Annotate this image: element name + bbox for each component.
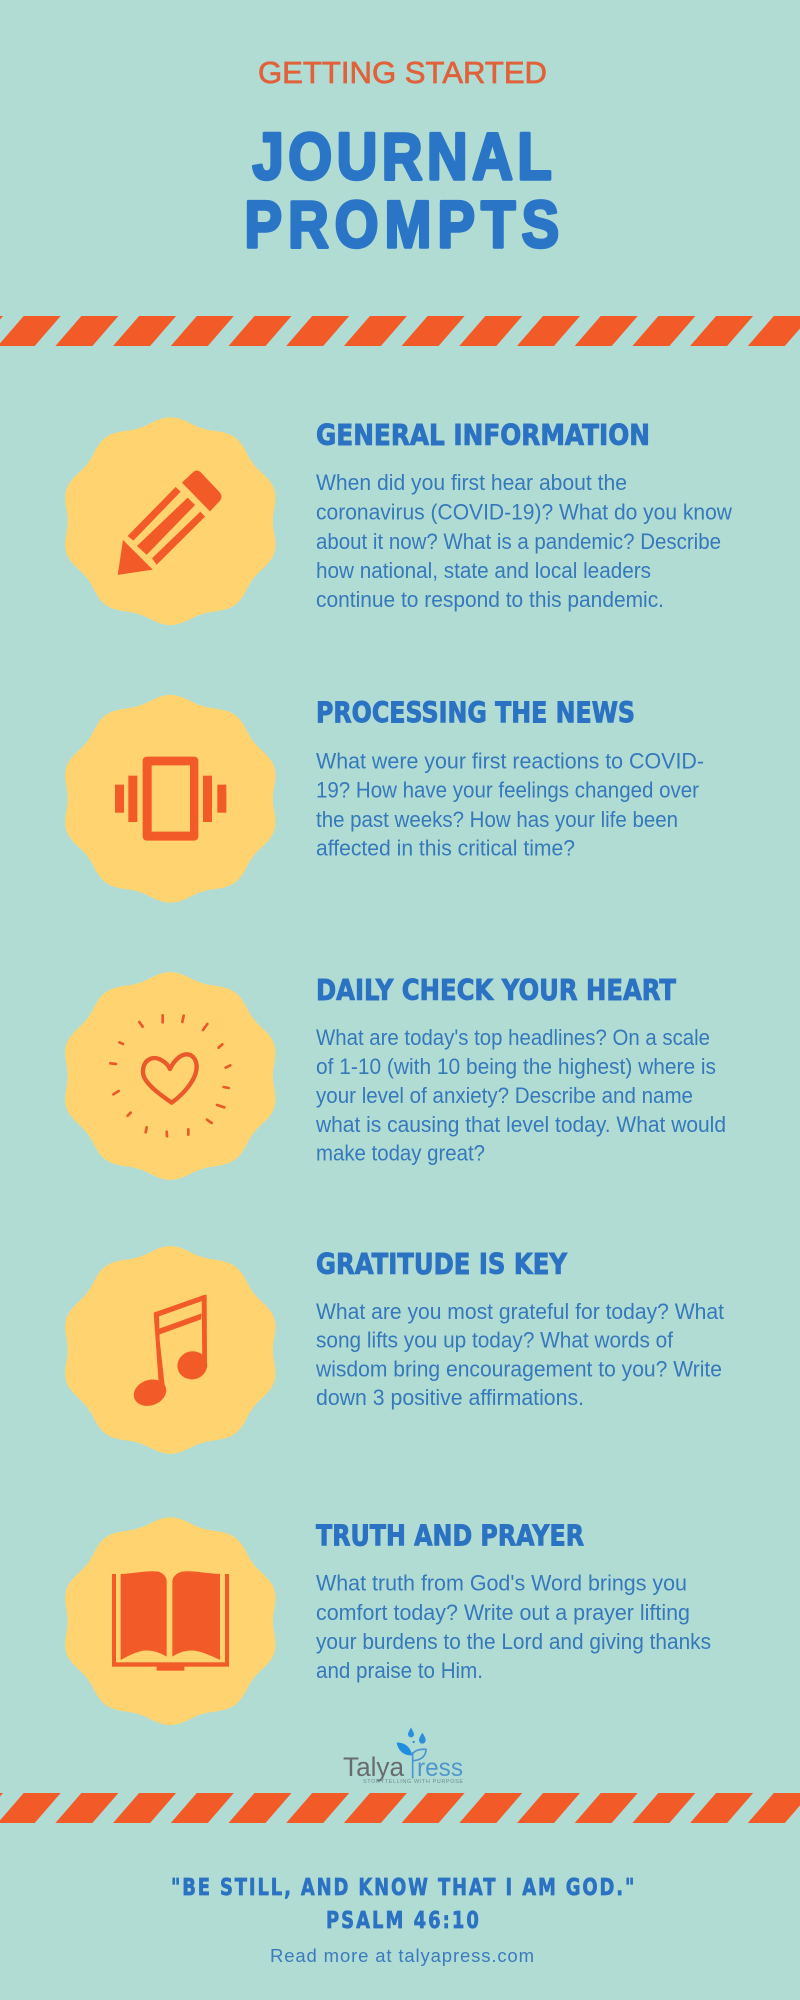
body text: your level of anxiety? Describe and name xyxy=(316,1083,693,1108)
body text: continue to respond to this pandemic. xyxy=(316,587,664,612)
logo icon: drops, leaves and P xyxy=(397,1727,426,1778)
wordmark dark: Talya xyxy=(343,1752,405,1782)
body text: the past weeks? How has your life been xyxy=(316,807,678,832)
body text: and praise to Him. xyxy=(316,1658,483,1683)
icon: open book xyxy=(112,1571,229,1671)
body text: wisdom bring encouragement to you? Write xyxy=(315,1357,722,1382)
panel: general information xyxy=(57,417,732,625)
icon: vibrating phone xyxy=(115,757,226,841)
body text: your burdens to the Lord and giving thanks xyxy=(316,1629,711,1654)
panel: gratitude is key xyxy=(57,1246,724,1454)
heading: TRUTH AND PRAYER xyxy=(316,1520,584,1553)
icon: pencil xyxy=(118,471,221,574)
citation: PSALM 46:10 xyxy=(326,1907,479,1934)
body text: When did you first hear about the xyxy=(316,470,627,495)
title line 2: PROMPTS xyxy=(244,188,559,261)
body text: how national, state and local leaders xyxy=(316,558,651,583)
read more link: Read more at talyapress.com xyxy=(270,1945,534,1966)
panel: processing the news xyxy=(57,695,704,903)
body text: song lifts you up today? What words of xyxy=(316,1328,674,1353)
body text: affected in this critical time? xyxy=(316,836,575,860)
body text xyxy=(315,1299,724,1410)
body text xyxy=(316,1571,711,1683)
badge xyxy=(57,695,284,903)
striped divider bottom xyxy=(0,1793,800,1823)
body text: make today great? xyxy=(316,1141,485,1166)
badge xyxy=(57,1517,284,1725)
panel: truth and prayer xyxy=(57,1517,711,1725)
logo: Talya Press xyxy=(343,1727,463,1785)
body text xyxy=(316,748,704,860)
quote: "BE STILL, AND KNOW THAT I AM GOD." xyxy=(171,1874,634,1901)
heading: DAILY CHECK YOUR HEART xyxy=(316,974,676,1007)
body text: down 3 positive affirmations. xyxy=(316,1385,584,1410)
header xyxy=(244,55,559,261)
body text: about it now? What is a pandemic? Describe xyxy=(316,529,721,554)
eyebrow: getting started: GETTING STARTED xyxy=(258,55,547,90)
body text: of 1-10 (with 10 being the highest) where is xyxy=(316,1054,716,1079)
footer xyxy=(171,1874,634,1966)
icon: music notes xyxy=(130,1294,210,1410)
body text: What were your first reactions to COVID- xyxy=(316,748,704,774)
body text xyxy=(316,470,732,612)
badge xyxy=(57,1246,284,1454)
body text xyxy=(315,1025,726,1166)
badge xyxy=(57,417,284,625)
icon: heart with rays xyxy=(110,1015,230,1136)
heading: PROCESSING THE NEWS xyxy=(316,697,635,730)
wordmark light: ress xyxy=(417,1754,463,1782)
body text: What are today's top headlines? On a scale xyxy=(316,1025,710,1050)
tagline: STORYTELLING WITH PURPOSE xyxy=(363,1779,463,1785)
body text: What are you most grateful for today? What xyxy=(316,1299,724,1324)
body text: 19? How have your feelings changed over xyxy=(316,778,699,803)
heading: GENERAL INFORMATION xyxy=(316,419,650,452)
body text: coronavirus (COVID-19)? What do you know xyxy=(316,500,732,524)
panel: daily check your heart xyxy=(57,972,726,1180)
body text: what is causing that level today. What would xyxy=(315,1112,726,1137)
badge xyxy=(57,972,284,1180)
body text: comfort today? Write out a prayer lifting xyxy=(316,1600,690,1625)
heading: GRATITUDE IS KEY xyxy=(316,1248,567,1281)
title line 1: JOURNAL xyxy=(252,120,552,193)
body text: What truth from God's Word brings you xyxy=(316,1571,687,1596)
striped divider top xyxy=(0,316,800,346)
